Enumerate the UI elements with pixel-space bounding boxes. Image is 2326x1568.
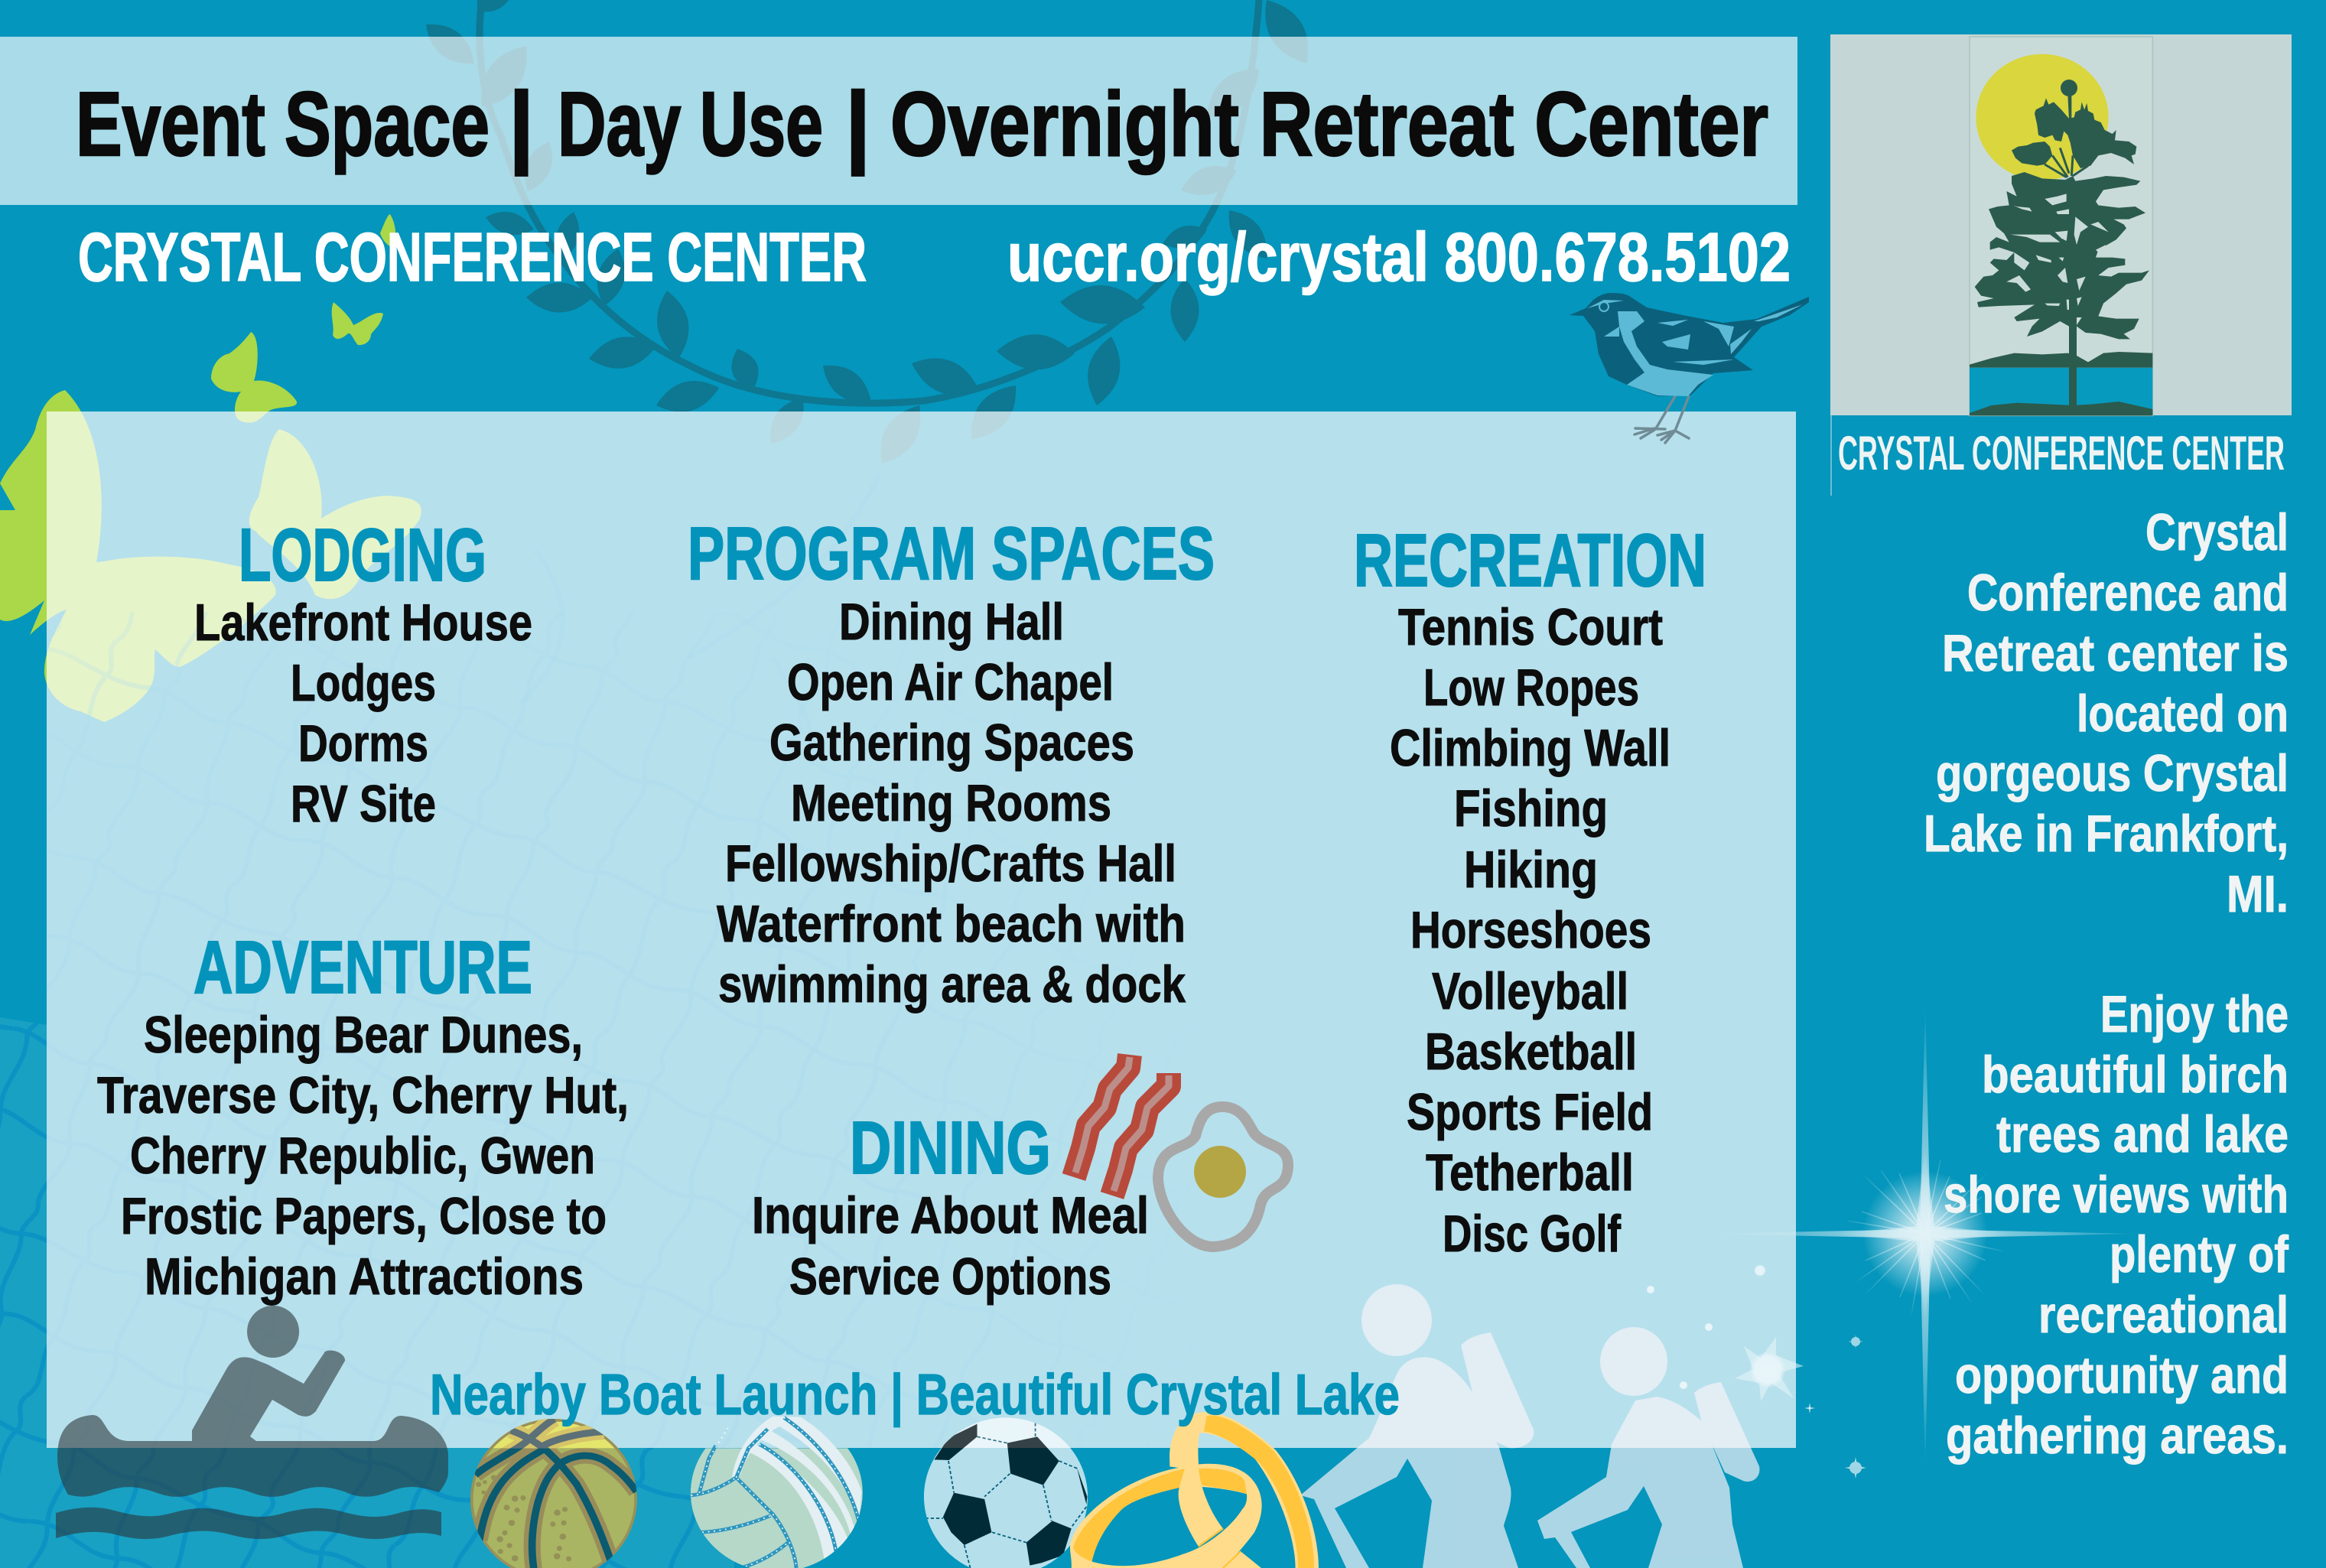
list: Waterfront beach with [717,895,1186,953]
title: Day Use [558,73,823,175]
list: Meeting Rooms [791,774,1111,832]
side text: location [1924,503,2289,923]
title: | [845,73,870,176]
volleyball seams [691,1417,859,1568]
basketball pebbles [476,1475,571,1561]
heading: PROGRAM SPACES [688,512,1215,595]
hiker two [1537,1327,1759,1568]
section: program spaces [688,512,1215,1013]
logo tree [1970,80,2152,415]
side text: location: MI. [2227,865,2289,923]
icon: sparkles [1647,1264,1866,1479]
background texture: lighter veined water area [0,1017,734,1568]
list: Fellowship/Crafts Hall [725,834,1176,893]
list [752,1186,1149,1306]
list: Tennis Court [1398,598,1663,656]
logo tree gaps [2006,194,2109,325]
volleyball green panels [690,1448,863,1568]
bird light markings [1587,300,1803,396]
banner panel [0,37,1797,205]
list: swimming area & dock [718,955,1186,1013]
heading: LODGING [239,513,486,597]
vine branch behind panels [426,0,1308,464]
logo sun [1976,54,2109,181]
paddler and canoe [57,1306,448,1497]
volleyball white stripes [727,1417,862,1566]
heading: RECREATION [1354,519,1706,602]
icon: volleyball [691,1413,863,1568]
subtitle: center name: CRYSTAL CONFERENCE CENTER [78,220,867,296]
list: Open Air Chapel [787,653,1114,711]
side text: views: recreational [2038,1286,2289,1344]
list: Gathering Spaces [769,714,1134,772]
title [76,73,1768,176]
list: Lakefront House [194,594,532,652]
basketball seams [474,1448,636,1568]
right ring [1170,1412,1319,1568]
section: recreation [1354,519,1706,1263]
list: Low Ropes [1423,659,1639,717]
list: Service Options [789,1248,1111,1306]
title: Overnight Retreat Center [890,73,1768,175]
list: Dorms [298,714,428,773]
icon: large butterfly behind panel [0,390,421,722]
side text: views [1944,985,2289,1465]
left ring [1070,1464,1262,1568]
logo water [1970,368,2152,415]
side text: location: Crystal [2145,503,2289,561]
bird body [1570,293,1809,396]
title: Event Space [76,73,490,175]
list: Sports Field [1407,1083,1653,1141]
icon: fried egg [1158,1107,1288,1247]
list [1390,598,1670,1263]
icon: hikers [1300,1284,1759,1568]
icon: starburst [1703,1004,2134,1470]
basketball body [470,1419,637,1568]
list: Traverse City, Cherry Hut, [97,1066,629,1124]
boat launch tagline: Nearby Boat Launch | Beautiful Crystal Lake [430,1362,1400,1427]
list: RV Site [291,775,436,833]
logo caption rule [1830,415,1832,496]
contact: website and phone: uccr.org/crystal 800.678.5102 [1007,220,1791,296]
list: Cherry Republic, Gwen [130,1127,595,1185]
list: Climbing Wall [1390,719,1670,777]
list: Sleeping Bear Dunes, [144,1006,583,1064]
list: Inquire About Meal [752,1186,1149,1244]
list: Tetherball [1426,1143,1634,1202]
list: Horseshoes [1410,901,1651,959]
section: adventure [97,926,629,1306]
section: dining [752,1106,1149,1306]
list: Michigan Attractions [145,1248,584,1306]
icon: soccer ball [924,1417,1088,1568]
logo inner frame [1970,37,2152,415]
icon: bird [1570,293,1809,443]
logo artwork [1970,37,2152,415]
list [194,594,532,833]
hiker one [1300,1284,1534,1568]
bird legs [1635,396,1689,443]
icon: canoe with paddler [56,1306,448,1539]
list: Disc Golf [1443,1205,1621,1263]
icon: bacon [1074,1055,1169,1196]
water line [56,1508,441,1539]
main content panel [47,412,1796,1448]
section: lodging [194,513,532,833]
list: Frostic Papers, Close to [121,1187,607,1245]
list: Volleyball [1432,962,1628,1020]
title: | [509,73,534,176]
heading: ADVENTURE [194,926,532,1009]
list [717,593,1186,1013]
icon: golden rings [1070,1412,1319,1568]
heading: DINING [850,1106,1051,1189]
logo background [1830,34,2292,415]
icon: small butterflies [211,214,395,423]
list [97,1006,629,1306]
list: Fishing [1454,779,1608,838]
panel texture [47,612,247,716]
basketball bands [474,1449,636,1568]
list: Hiking [1464,841,1598,899]
list: Basketball [1425,1023,1637,1081]
icon: basketball [470,1419,637,1568]
list: Dining Hall [839,593,1064,651]
side text: views: plenty of [2110,1225,2289,1283]
logo box [1830,34,2292,415]
list: Lodges [291,654,436,712]
